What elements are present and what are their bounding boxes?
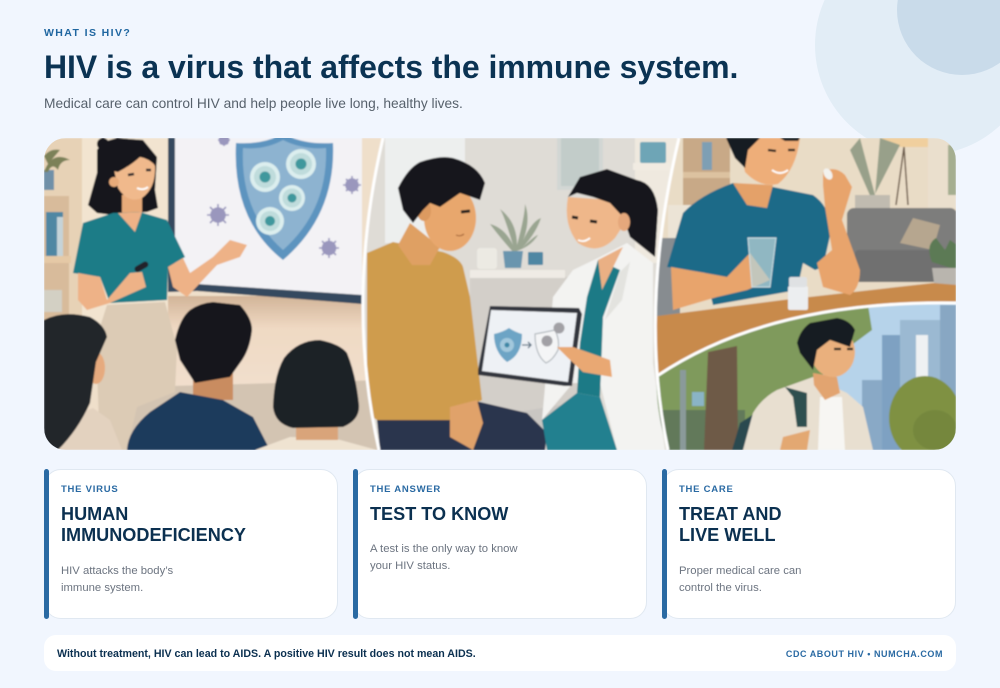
white dividers — [363, 138, 383, 450]
table — [650, 283, 957, 380]
audience: man — [127, 302, 270, 450]
card: the virus: immune system. — [61, 582, 143, 594]
buildings — [862, 305, 958, 450]
bookshelf and plant — [44, 150, 71, 321]
card: the answer: your HIV status. — [370, 560, 450, 572]
doctor in white coat — [542, 169, 665, 450]
audience: left woman — [44, 314, 122, 450]
tablet — [478, 306, 612, 386]
water glass — [748, 238, 776, 287]
scene: presenter with class — [44, 134, 384, 450]
scene: man taking medication — [650, 138, 960, 380]
man in sweater — [367, 157, 547, 450]
card: the care: TREAT AND — [679, 504, 782, 524]
tablet shield icons — [494, 322, 564, 363]
card: the virus: HIV attacks the body’s — [61, 565, 173, 577]
audience: woman with bob — [255, 340, 377, 450]
card: the answer: TEST TO KNOW — [370, 504, 508, 524]
card: the virus — [44, 469, 338, 619]
card: the answer: A test is the only way to know — [370, 543, 518, 555]
accent bar: the answer — [353, 469, 358, 619]
footer note: Without treatment, HIV can lead to AIDS. A positive HIV result does not mean AIDS. — [57, 648, 476, 660]
card: the virus: HUMAN — [61, 504, 128, 524]
card: the care: control the virus. — [679, 582, 762, 594]
accent bar: the virus — [44, 469, 49, 619]
subtitle: Medical care can control HIV and help people live long, healthy lives. — [44, 96, 463, 111]
card: the care: THE CARE — [679, 484, 734, 495]
card: the virus: THE VIRUS — [61, 484, 118, 495]
card: the answer: THE ANSWER — [370, 484, 441, 495]
card: the care — [662, 469, 956, 619]
sofa — [847, 208, 957, 282]
title: HIV is a virus that affects the immune system. — [44, 48, 738, 84]
pill bottle — [788, 277, 808, 310]
potted plant and bottles — [477, 204, 543, 269]
trees — [656, 307, 956, 450]
card: the care: Proper medical care can — [679, 565, 801, 577]
potted plant — [928, 238, 956, 286]
card: the care: LIVE WELL — [679, 525, 776, 545]
shield with cells — [236, 134, 333, 260]
eyebrow: what is HIV: WHAT IS HIV? — [44, 27, 131, 39]
scene: clinic conversation — [360, 138, 680, 450]
virus icons on screen — [207, 134, 361, 258]
young man with backpack — [732, 318, 873, 450]
illustration panel — [44, 138, 956, 450]
card: the virus: IMMUNODEFICIENCY — [61, 525, 246, 545]
footer strip — [44, 635, 956, 671]
accent bar: the care — [662, 469, 667, 619]
presentation screen — [168, 134, 362, 304]
scene: young man outdoors — [656, 304, 956, 450]
source: CDC ABOUT HIV • NUMCHA.COM — [786, 649, 943, 659]
presenter — [73, 138, 247, 450]
picture and shelf — [557, 138, 670, 190]
card: the answer — [353, 469, 647, 619]
man in teal shirt — [667, 138, 860, 310]
shelves and room — [655, 138, 958, 328]
